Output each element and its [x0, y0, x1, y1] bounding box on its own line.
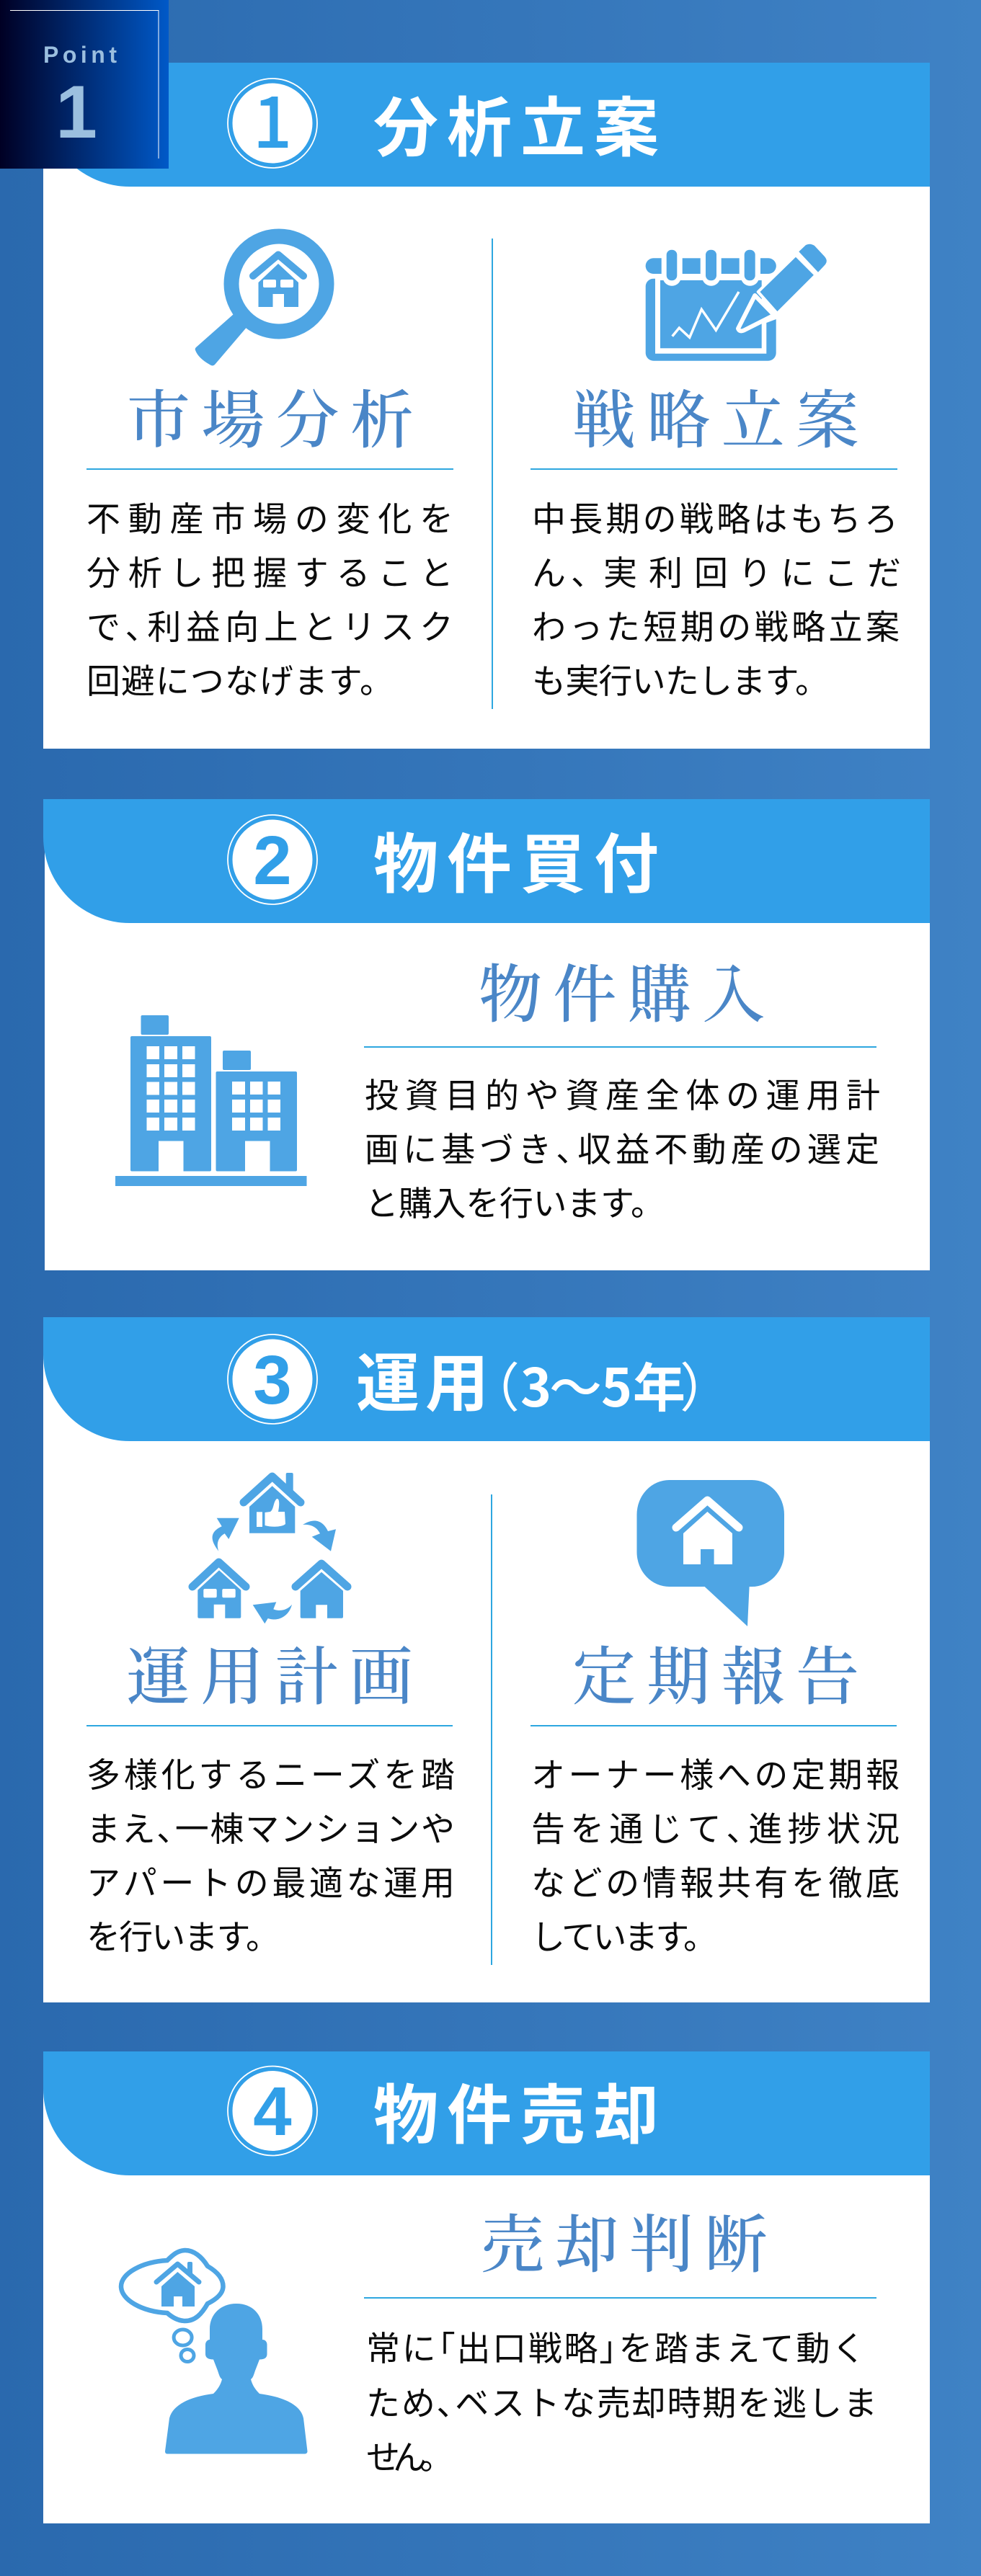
- header: 4 物件売却: 物件売却: [373, 2080, 659, 2152]
- header: 2 物件買付: 物件買付: [373, 829, 659, 901]
- icon: magnifier with house: [195, 236, 327, 366]
- text: strategy planning description: も実行いたします。: [532, 662, 829, 700]
- header: 3 運用(3～5年): 3: [253, 1342, 292, 1419]
- panel: 1 analysis and planning: [43, 63, 930, 749]
- badge: Point 1: 1: [56, 71, 97, 154]
- badge: Point 1: Point: [43, 42, 117, 68]
- sub-heading: 運用計画: 運用計画: [126, 1644, 413, 1713]
- text: regular report description: しています。: [531, 1918, 717, 1956]
- sub-heading: 売却判断: 売却判断: [481, 2211, 768, 2281]
- text: operation plan description: を行います。: [86, 1918, 280, 1956]
- text: market analysis description: 分析し把握すること: [86, 554, 453, 592]
- text: regular report description: [531, 1756, 900, 1956]
- text: property purchase description: と購入を行います。: [365, 1185, 665, 1223]
- text: regular report description: などの情報共有を徹底: [531, 1864, 900, 1902]
- header: 4 物件売却: 4: [253, 2073, 292, 2150]
- panel: 3 operation: [43, 1317, 930, 2002]
- text: market analysis description: 回避につなげます。: [86, 662, 394, 700]
- text: strategy planning description: 中長期の戦略はもちろ: [532, 500, 898, 538]
- text: operation plan description: まえ、一棟マンションや: [86, 1810, 455, 1848]
- header: 3 運用(3～5年): [43, 1317, 930, 1441]
- icon: office buildings: [115, 1015, 307, 1186]
- icon: three houses cycle: [192, 1473, 347, 1623]
- text: operation plan description: アパートの最適な運用: [86, 1864, 455, 1902]
- text: property purchase description: [365, 1077, 880, 1223]
- icon: person thinking of a house: [121, 2250, 307, 2454]
- text: property purchase description: 画に基づき、収益不動産の選定: [365, 1131, 879, 1169]
- badge: Point 1: [0, 0, 169, 169]
- text: market analysis description: で、利益向上とリスク: [86, 608, 453, 646]
- header: 2 物件買付: 2: [253, 822, 292, 899]
- icon: calendar chart and pencil: [646, 244, 827, 361]
- text: market analysis description: [86, 500, 453, 700]
- text: sale decision description: せん。: [366, 2438, 453, 2477]
- icon: speech bubble with house: [637, 1480, 784, 1626]
- sub-heading: 物件購入: 物件購入: [479, 961, 765, 1031]
- text: strategy planning description: わった短期の戦略立案: [532, 608, 900, 646]
- text: sale decision description: 常に「出口戦略」を踏まえて動く: [366, 2330, 866, 2368]
- header: 4 物件売却: [43, 2051, 930, 2175]
- divider: [492, 239, 493, 709]
- header: 1 分析立案: 分析立案: [373, 93, 659, 165]
- text: operation plan description: 多様化するニーズを踏: [86, 1756, 455, 1794]
- header: 3 運用(3～5年): （3～5年）: [467, 1346, 732, 1422]
- header: 3 運用(3～5年): 運用: [356, 1348, 489, 1420]
- header: 1 分析立案: [43, 63, 930, 187]
- panel: 4 property sale: [43, 2051, 930, 2523]
- text: sale decision description: ため、ベストな売却時期を逃しま: [366, 2384, 877, 2423]
- text: strategy planning description: ん、実利回りにこだ: [532, 554, 901, 592]
- sub-heading: 戦略立案: 戦略立案: [572, 387, 859, 457]
- panel: 2 property purchase: [43, 799, 930, 1270]
- text: regular report description: オーナー様への定期報: [531, 1756, 900, 1794]
- text: market analysis description: 不動産市場の変化を: [86, 500, 453, 538]
- text: operation plan description: [86, 1756, 455, 1956]
- header: 2 物件買付: [43, 799, 930, 923]
- text: sale decision description: [366, 2330, 877, 2477]
- header: 1 分析立案: 1: [253, 68, 292, 168]
- text: strategy planning description: [532, 500, 901, 700]
- sub-heading: 定期報告: 定期報告: [572, 1644, 859, 1713]
- sub-heading: 市場分析: 市場分析: [127, 387, 414, 457]
- text: property purchase description: 投資目的や資産全体の運用計: [365, 1077, 880, 1115]
- divider: [491, 1494, 492, 1965]
- text: regular report description: 告を通じて、進捗状況: [531, 1810, 900, 1848]
